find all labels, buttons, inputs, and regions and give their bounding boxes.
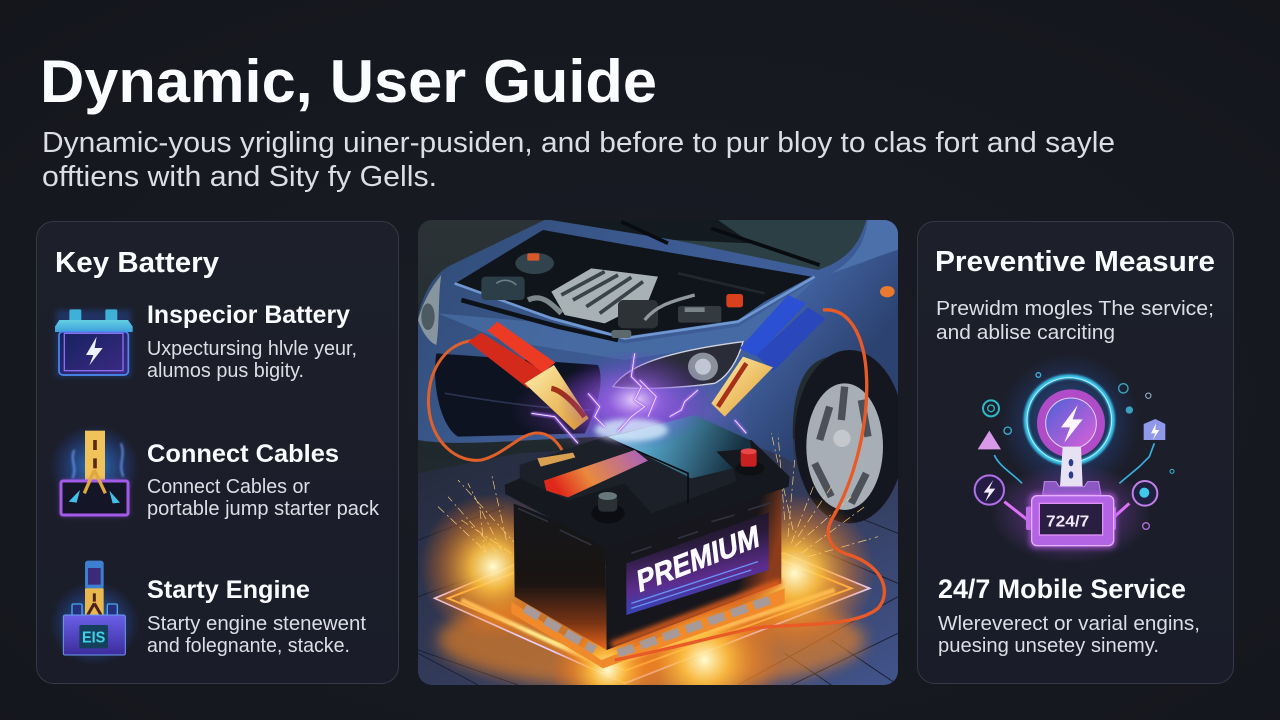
- car body: [418, 220, 905, 523]
- step: connect cables: portable jump starter pack: [147, 497, 380, 520]
- turn signal: [880, 286, 895, 297]
- icon: 24/7 service battery hub: 724/7: [1046, 514, 1089, 531]
- subtitle text: Dynamic-yous yrigling uiner-pusiden, and before to pur bloy to clas fort and sayle: [42, 127, 1115, 159]
- sparks: [438, 433, 878, 560]
- icon: 24/7 service battery hub: [975, 353, 1174, 563]
- lightning arcs: [531, 350, 746, 450]
- title: Dynamic, User Guide: [40, 48, 657, 115]
- step: inspect battery: Uxpectursing hlvle yeur,: [147, 337, 357, 360]
- step: connect cables: [147, 440, 380, 520]
- clamp: blue: [711, 295, 825, 417]
- panel: key battery: [36, 222, 398, 684]
- step: inspect battery: alumos pus bigity.: [147, 359, 304, 382]
- engine bay: [455, 230, 811, 337]
- step: start engine: and folegnante, stacke.: [147, 634, 350, 657]
- positive terminal: [735, 448, 764, 476]
- battery right face: [605, 487, 781, 650]
- subtitle text: offtiens with and Sity fy Gells.: [42, 161, 437, 193]
- cable: blue clamp: [615, 310, 884, 660]
- hood highlight: [438, 280, 815, 360]
- battery base: [511, 588, 785, 668]
- preventive description: Prewidm mogles The service;: [936, 297, 1214, 320]
- step: start engine: Starty Engine: [147, 576, 310, 604]
- step: start engine: Starty engine stenewent: [147, 612, 366, 635]
- engine block: [551, 268, 658, 323]
- premium label: PREMIUM: [635, 518, 761, 600]
- preventive description: and ablise carciting: [936, 321, 1115, 344]
- step: connect cables: Connect Cables: [147, 440, 339, 468]
- icon: connect cables: [49, 425, 139, 516]
- icon: start engine: EIS: [82, 630, 105, 647]
- step: connect cables: Connect Cables or: [147, 475, 310, 498]
- panel: preventive measure: [918, 222, 1234, 684]
- floor glow frame: [422, 496, 874, 685]
- preventive description: [936, 297, 1214, 344]
- windshield: [551, 220, 866, 270]
- front grille: [435, 353, 601, 437]
- headlight: [613, 342, 743, 388]
- negative terminal: [591, 492, 625, 523]
- cable: red clamp: [428, 341, 562, 460]
- battery: [505, 415, 790, 668]
- service: 24/7 mobile: 24/7 Mobile Service: [938, 574, 1186, 604]
- subtitle text: [42, 127, 1115, 193]
- service: 24/7 mobile: [938, 574, 1200, 657]
- clamp: red: [468, 322, 589, 430]
- ground tiles: [418, 433, 898, 685]
- heading: preventive measure: Preventive Measure: [935, 246, 1215, 278]
- icon: start engine: [49, 561, 139, 665]
- service: 24/7 mobile: Wlereverect or varial engins,: [938, 612, 1200, 635]
- panel: hero illustration of car and battery: [418, 220, 905, 720]
- heading: key battery: Key Battery: [55, 247, 219, 279]
- battery lid: [505, 440, 790, 548]
- icon: battery inspection: [55, 309, 133, 377]
- service: 24/7 mobile: puesing unsetey sinemy.: [938, 634, 1159, 657]
- step: inspect battery: [147, 301, 357, 382]
- step: inspect battery: Inspecior Battery: [147, 301, 350, 329]
- step: start engine: [147, 576, 366, 657]
- wheel: [795, 350, 905, 523]
- left headlight: [418, 275, 441, 345]
- battery left face: [514, 503, 607, 650]
